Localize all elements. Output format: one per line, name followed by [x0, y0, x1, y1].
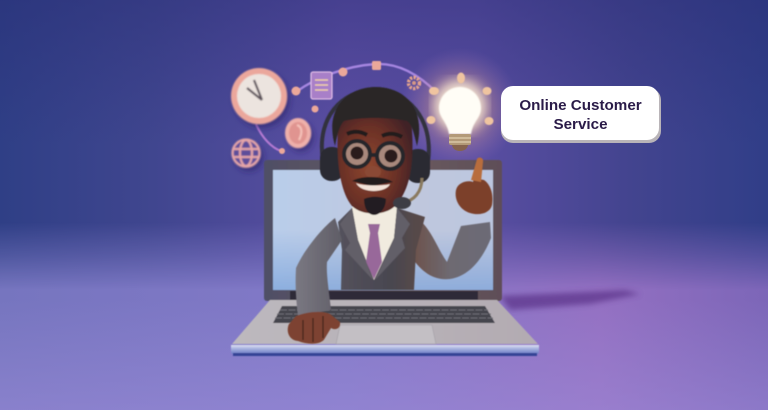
lapels [340, 208, 410, 280]
connector arc [296, 64, 436, 92]
arm: resting left arm [296, 218, 342, 316]
icon: light bulb [400, 48, 520, 168]
face [338, 107, 412, 214]
callout [501, 86, 661, 143]
callout: Service [553, 116, 608, 133]
icon group: floating service icons [231, 61, 436, 166]
callout text: Online Customer [519, 97, 642, 114]
headset band [322, 90, 429, 162]
laptop lid [264, 160, 502, 301]
resting hand [288, 312, 340, 344]
icon: gear [408, 78, 420, 88]
laptop shadow [500, 290, 640, 310]
microphone arm [402, 178, 422, 203]
laptop front edge [231, 345, 539, 355]
floor light [0, 300, 768, 410]
laptop [231, 160, 539, 356]
icon: globe [232, 140, 260, 166]
background floor [0, 222, 768, 410]
torso [338, 208, 425, 290]
shirt [352, 207, 397, 280]
background top shading [0, 0, 768, 290]
tie [366, 224, 382, 279]
glasses [344, 141, 403, 169]
character [288, 87, 493, 344]
icon: badge [285, 118, 311, 148]
eyebrows [347, 132, 402, 137]
goatee [364, 197, 386, 215]
connector nodes [279, 61, 381, 154]
headset ear cups [320, 147, 430, 183]
connector to globe [256, 124, 281, 151]
eyes [350, 146, 398, 162]
laptop hinge [290, 291, 478, 303]
icon: document [311, 72, 332, 99]
trackpad [336, 325, 436, 344]
hair [332, 87, 419, 146]
bulb rays [426, 72, 494, 125]
arm: raised right arm [410, 217, 491, 279]
nose [365, 166, 381, 178]
moustache [352, 177, 393, 186]
laptop screen [273, 170, 493, 290]
icon: clock [231, 68, 287, 124]
laptop deck [232, 300, 538, 344]
microphone [393, 197, 411, 209]
raised hand [456, 158, 493, 214]
background wall [0, 0, 768, 290]
mouth [356, 183, 390, 191]
keyboard [273, 306, 495, 323]
